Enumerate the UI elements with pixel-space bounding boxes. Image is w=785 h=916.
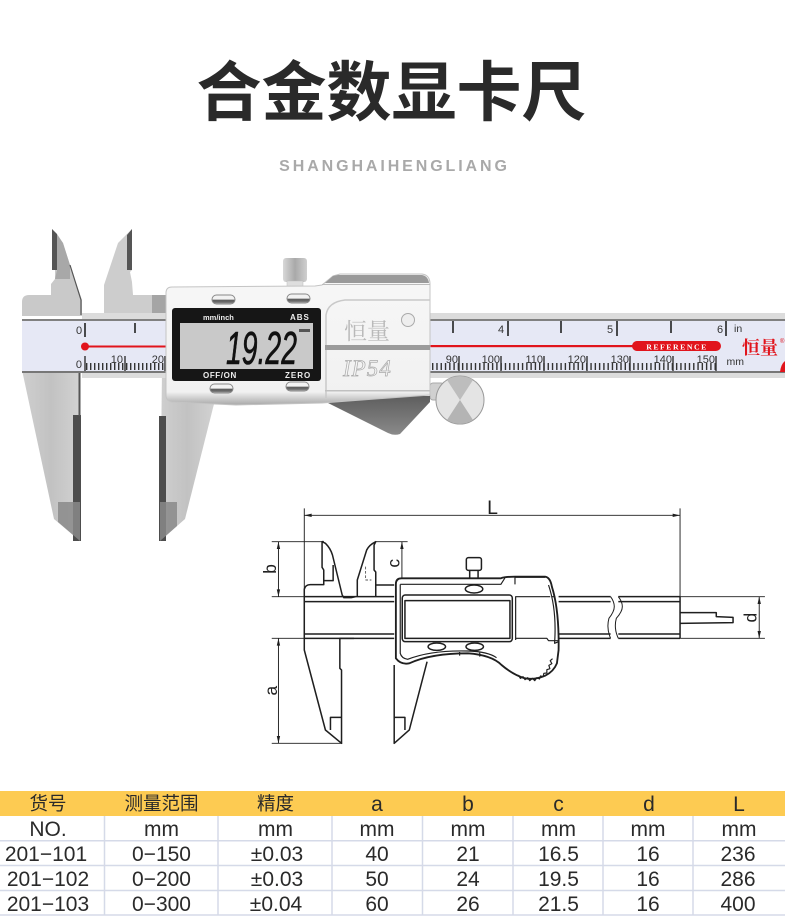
units row: mm [360,818,394,841]
header row: c [553,793,564,816]
data row 201-102: 201−102 [7,868,89,891]
data row 201-101: 236 [720,843,756,866]
drawing buttons [428,585,483,650]
technical dimension drawing [260,497,765,743]
millimetre scale [85,356,717,371]
header row [29,793,745,816]
header row: b [462,793,474,816]
beam outline [304,597,680,638]
top lock screw [283,258,307,287]
thumb wheel [430,376,484,424]
units row [29,818,756,841]
dimension a: a [261,686,281,695]
brand mark on body: 恒量 [344,319,390,344]
header row: 货号 [29,793,67,814]
inch numbers [76,323,742,337]
red brand logo [742,338,785,372]
LCD display [172,308,321,381]
data row 201-102: ±0.03 [251,868,303,891]
header row: 测量范围 [124,793,199,814]
dimension L [304,497,680,638]
millimetre numbers: 100 [482,354,500,366]
units row: mm [258,818,293,841]
depth rod [680,613,733,623]
units row: mm [541,818,576,841]
dimension a [261,638,342,743]
data row 201-102: 24 [456,868,480,891]
drawing lock screw [466,558,481,578]
dimension b [260,542,324,597]
data row 201-102 [7,868,756,891]
data row 201-103: 60 [365,893,389,916]
dimension d: d [740,613,761,622]
ruler beam [22,313,785,378]
title: 合金数显卡尺 [196,56,587,129]
lower jaws [304,638,427,743]
data row 201-103 [7,893,756,916]
millimetre numbers: 20 [152,354,164,366]
data row 201-102: 286 [720,868,756,891]
header row: 精度 [257,793,294,814]
data row 201-103: 16 [636,893,660,916]
units row: mm [144,818,179,841]
body buttons [210,294,310,393]
head outline [396,577,559,679]
data row 201-103: 26 [456,893,480,916]
inch scale [85,321,726,337]
millimetre numbers [76,354,744,371]
millimetre numbers: 90 [446,354,458,366]
wedge beneath body [322,396,430,435]
knurled thumb edge [518,659,553,681]
millimetre numbers: 130 [611,354,629,366]
data row 201-101: 201−101 [5,843,87,866]
units row: NO. [29,818,67,841]
inch numbers: 6 [717,324,723,336]
inch numbers: in [734,323,742,335]
upper left jaw [22,229,82,316]
units row: mm [722,818,756,841]
data row 201-101: ±0.03 [251,843,303,866]
IP54 mark: IP54 [342,356,392,381]
millimetre numbers: 140 [654,354,672,366]
millimetre numbers: 0 [76,359,82,371]
header row: d [643,793,655,816]
photo: digital caliper [22,229,785,541]
LCD display: OFF/ON [203,371,237,380]
subtitle: SHANGHAIHENGLIANG [279,158,510,175]
data row 201-102: 19.5 [538,868,579,891]
digital head body [166,274,430,405]
LCD display: 19.22 [226,322,297,374]
data row 201-102: 16 [636,868,660,891]
header row: a [371,793,383,816]
header row: L [733,793,745,816]
table grid [0,816,785,915]
LCD display: ZERO [285,371,311,380]
data row 201-103: 0−300 [132,893,191,916]
brand mark on body [344,314,414,344]
dimension c: c [384,559,404,568]
red brand logo: 恒量 [742,338,778,358]
dimension b: b [260,564,280,574]
units row: mm [630,818,666,841]
lower left jaw [22,370,81,541]
inch numbers: 5 [607,324,613,336]
units row: mm [450,818,486,841]
table header band [0,791,785,816]
millimetre numbers: 120 [568,354,586,366]
red reference line: REFERENCE [646,342,708,352]
millimetre numbers: 10 [111,354,123,366]
red brand logo: ® [780,338,785,345]
LCD display: mm/inch [203,313,234,322]
data row 201-103: 21.5 [538,893,579,916]
drawing LCD [402,595,512,642]
data row 201-102: 0−200 [132,868,191,891]
data row 201-101: 21 [456,843,480,866]
data row 201-103: ±0.04 [250,893,303,916]
data row 201-101 [5,843,756,866]
millimetre numbers: 150 [697,354,715,366]
data row 201-102: 50 [365,868,389,891]
inch numbers: 4 [498,324,504,336]
data row 201-103: 201−103 [7,893,89,916]
dimension c [376,542,408,578]
lower right jaw [159,370,215,541]
LCD display: ABS [290,313,310,322]
data row 201-101: 0−150 [132,843,191,866]
millimetre numbers: 110 [525,354,543,366]
specification table [0,791,785,916]
millimetre numbers: mm [726,356,744,368]
data row 201-103: 400 [720,893,756,916]
data row 201-101: 16 [636,843,660,866]
dimension L: L [487,497,498,519]
red reference line [81,341,721,352]
data row 201-101: 16.5 [538,843,579,866]
inch numbers: 0 [76,325,82,337]
dimension d [680,597,765,638]
data row 201-101: 40 [365,843,389,866]
upper right jaw [104,229,170,316]
upper jaws [304,542,394,598]
